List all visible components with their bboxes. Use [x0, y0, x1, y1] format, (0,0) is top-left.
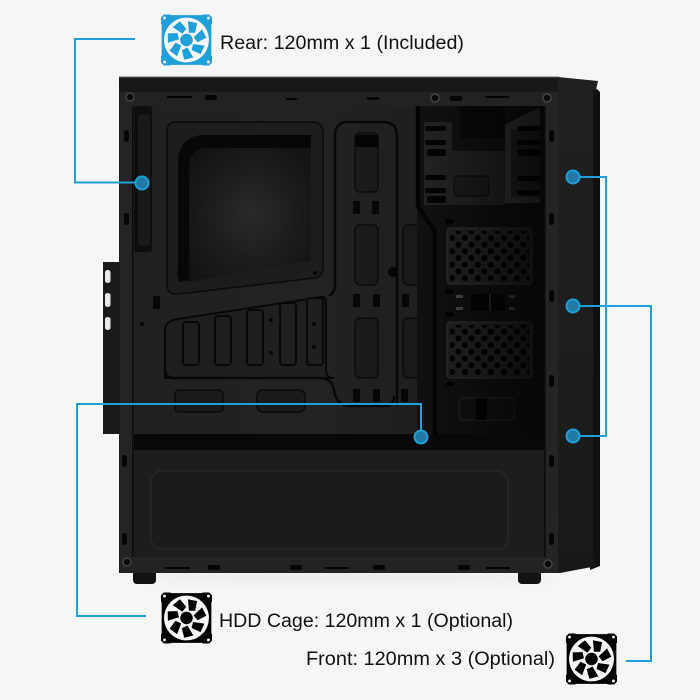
lower plate detail: [446, 382, 514, 420]
front callout connectors: [579, 177, 651, 661]
lower motherboard tray frame: [165, 297, 394, 406]
corner screws: [123, 93, 552, 568]
bottom compartment gap: [134, 434, 544, 450]
case feet: [133, 570, 541, 584]
right rim: [544, 92, 558, 573]
top centre slot shadow: [355, 135, 378, 147]
upper HDD cage: [447, 228, 532, 284]
HDD fan icon: [161, 592, 212, 644]
bottom rim: [120, 557, 558, 573]
left rim: [120, 92, 134, 573]
cable pass slots: [175, 390, 305, 412]
front callout markers: [566, 170, 580, 442]
tray small holes: [140, 201, 428, 404]
upper drive bay: [424, 106, 540, 205]
HDD label: HDD Cage: 120mm x 1 (Optional): [219, 611, 513, 632]
bay slots: [425, 126, 540, 203]
case shadow: [130, 574, 560, 582]
lower frame slots: [183, 298, 323, 365]
centre slots: [355, 133, 426, 378]
bay shadow: [417, 106, 544, 434]
CPU cutout frame: [167, 122, 323, 294]
rear callout connector: [75, 39, 136, 182]
front fan icon: [566, 633, 617, 685]
rear label: Rear: 120mm x 1 (Included): [220, 33, 464, 54]
back panel: [134, 106, 544, 434]
HDD callout connector: [77, 404, 421, 616]
tray divider: [418, 106, 435, 434]
PSU shroud: [135, 450, 543, 558]
lighting overlay: [134, 106, 544, 434]
rear fan icon: [161, 14, 212, 66]
cage mount details: [445, 219, 515, 317]
PC case photo: [103, 76, 600, 584]
rim slots: [122, 95, 554, 570]
top edge: [119, 77, 559, 92]
case body: [119, 77, 559, 573]
rear expansion bracket: [103, 262, 119, 434]
front bezel: [558, 77, 598, 573]
shroud emboss: [151, 471, 508, 549]
front label: Front: 120mm x 3 (Optional): [306, 649, 555, 670]
lower HDD cage: [447, 322, 532, 378]
rear callout marker: [136, 176, 148, 190]
tall centre panel: [329, 122, 397, 406]
top rim: [120, 92, 558, 106]
HDD callout marker: [414, 430, 428, 444]
rear fan: [134, 106, 152, 252]
front bezel back strip: [590, 89, 600, 570]
